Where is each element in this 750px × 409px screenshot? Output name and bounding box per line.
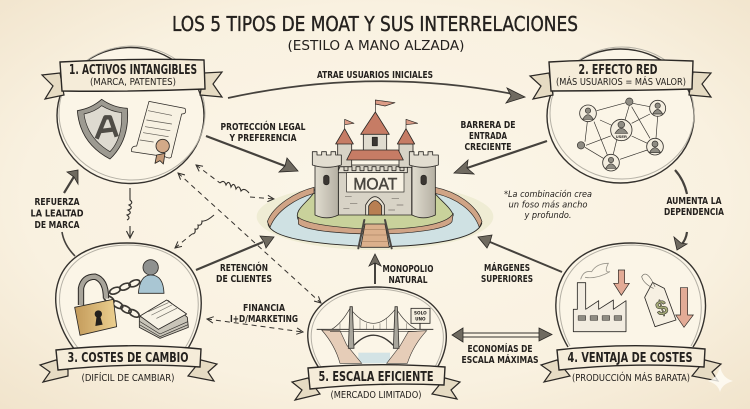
main roof (347, 150, 403, 160)
icon: network diagram (577, 98, 666, 171)
icon: red arrow down factory (614, 270, 629, 295)
label: financia I+D (230, 303, 298, 325)
label: margenes superiores: MÁRGENES (484, 262, 530, 274)
icon: patent scroll (132, 101, 186, 164)
moat sign: MOAT (353, 174, 397, 193)
water (358, 353, 390, 363)
arrow: economias de escala (452, 328, 552, 342)
subtitle: (ESTILO A MANO ALZADA) (288, 38, 464, 54)
label: economias de escala: ESCALA MÁXIMAS (462, 354, 538, 366)
banner 5 (292, 365, 460, 400)
arrow: squiggle activos to costes (127, 188, 132, 238)
label: aumenta la dependencia (664, 196, 724, 218)
bridge (358, 220, 392, 248)
label: proteccion legal: Y PREFERENCIA (229, 133, 297, 144)
label: retencion de clientes: DE CLIENTES (216, 274, 272, 285)
arrow labels (30, 70, 724, 366)
icon: papers (139, 300, 188, 338)
label: refuerza la lealtad: LA LEALTAD (30, 208, 84, 220)
icon: factory (573, 283, 626, 332)
label: barrera de entrada (460, 120, 516, 153)
island bank (298, 213, 453, 234)
note: combinacion (504, 189, 592, 221)
castle keep wall (338, 165, 412, 215)
central tower (361, 100, 395, 151)
banner 1 (42, 59, 222, 99)
merlons (337, 167, 407, 173)
rear right tower (397, 119, 418, 167)
circle 4 (556, 243, 706, 347)
label: margenes superiores (481, 262, 533, 285)
arrow: margenes superiores (478, 235, 562, 272)
label: monopolio natural: MONOPOLIO (382, 264, 434, 275)
moat water (268, 190, 482, 247)
central castle with moat (257, 100, 493, 250)
label: retencion de clientes (216, 262, 272, 285)
arrow: dashed squiggle activos to moat (196, 165, 274, 199)
subtitle 3: (DIFÍCIL DE CAMBIAR) (82, 372, 174, 384)
label: barrera de entrada: ENTRADA (469, 131, 507, 142)
label: atrae usuarios iniciales: ATRAE USUARIOS INICIALES (317, 70, 433, 81)
label: proteccion legal: PROTECCIÓN LEGAL (220, 121, 306, 133)
panel: 5 escala eficiente (292, 287, 460, 401)
icon: bridge and canyon (317, 307, 433, 363)
panel: 3 costes de cambio (40, 243, 217, 384)
label: barrera de entrada: BARRERA DE (460, 120, 516, 131)
circle 3 (56, 243, 201, 350)
banner 4 (541, 346, 721, 382)
banner 4: 4. VENTAJA DE COSTES (568, 351, 692, 366)
banner 2 (530, 60, 711, 99)
banner 1: (MARCA, PATENTES) (90, 77, 176, 88)
banner 3: 3. COSTES DE CAMBIO (68, 351, 189, 366)
icons: factory, price tag, arrows (573, 263, 693, 332)
label: barrera de entrada: CRECIENTE (464, 142, 512, 153)
icons: lock, chain, person, papers (75, 260, 188, 338)
circle 2 (547, 47, 694, 183)
label: financia I+D: I+D/MARKETING (230, 314, 298, 325)
icons: shield and patent (77, 99, 186, 164)
icon: padlock (75, 277, 117, 335)
label: economias de escala: ECONOMÍAS DE (468, 343, 533, 355)
arrow: refuerza la lealtad (62, 170, 78, 256)
label: retencion de clientes: RETENCIÓN (220, 262, 268, 274)
canyon right (387, 331, 427, 363)
arrow: monopolio natural (369, 254, 381, 284)
label: monopolio natural (382, 264, 434, 286)
label: refuerza la lealtad: DE MARCA (34, 220, 80, 231)
label: aumenta la dependencia: DEPENDENCIA (664, 207, 724, 218)
outer bank (267, 187, 482, 227)
arrow: atrae usuarios iniciales (228, 81, 525, 103)
panel: 4 ventaja de costes (541, 243, 721, 384)
icon: red arrow down tag (676, 288, 693, 327)
banner 3 (40, 346, 217, 382)
arrow: proteccion legal (206, 136, 298, 172)
icon: chain (103, 278, 141, 319)
label: financia I+D: FINANCIA (243, 303, 285, 314)
icon: smoke (581, 263, 610, 279)
island (297, 193, 453, 232)
label: refuerza la lealtad (30, 197, 84, 231)
rear left tower (336, 119, 354, 167)
icon: network diagram: USER (616, 134, 627, 139)
gate (366, 197, 384, 215)
banner 2: 2. EFECTO RED (578, 63, 658, 78)
note: combinacion: un foso más ancho (508, 200, 588, 210)
title: LOS 5 TIPOS DE MOAT Y SUS INTERRELACIONES (172, 12, 578, 36)
circle 1 (57, 46, 205, 184)
label: economias de escala (462, 343, 538, 366)
label: monopolio natural: NATURAL (388, 275, 428, 286)
label: margenes superiores: SUPERIORES (481, 274, 533, 285)
panel: 1 activos intangibles (42, 46, 222, 184)
banner 2: (MÁS USUARIOS = MÁS VALOR) (556, 76, 686, 88)
decorative sparkle (708, 366, 733, 392)
note: combinacion: y profundo. (523, 211, 572, 221)
panel: 2 efecto red (530, 47, 711, 183)
arrow: aumenta la dependencia (674, 170, 687, 250)
arrow: dashed link to escala eficiente (178, 173, 321, 303)
banner 5: 5. ESCALA EFICIENTE (318, 370, 434, 385)
label: aumenta la dependencia: AUMENTA LA (666, 196, 722, 207)
icon: person (138, 260, 164, 293)
wall bricks (343, 197, 403, 210)
left tower (312, 152, 341, 218)
grass halo (257, 183, 493, 250)
right tower (409, 152, 438, 218)
sign: solo uno (411, 308, 430, 329)
label: proteccion legal (220, 121, 306, 144)
icon: shield (77, 99, 128, 159)
arrow: retencion de clientes (196, 236, 274, 270)
sign: solo uno: UNO (415, 316, 426, 322)
sign: solo uno: SOLO (414, 310, 427, 316)
arrow: financia I+D (207, 319, 303, 332)
banner 1: 1. ACTIVOS INTANGIBLES (69, 63, 197, 78)
arrow: squiggle costes to moat (175, 215, 214, 248)
subtitle 5: (MERCADO LIMITADO) (330, 390, 422, 401)
icon: price tag: $ (653, 296, 671, 321)
arrows between concepts (62, 81, 687, 342)
circle 5 (308, 287, 446, 368)
note: combinacion: *La combinación crea (504, 189, 592, 200)
canyon left (322, 330, 362, 363)
bridge (317, 307, 433, 348)
label: refuerza la lealtad: REFUERZA (34, 197, 80, 208)
arrow: barrera de entrada (454, 141, 547, 174)
subtitle 4: (PRODUCCIÓN MÁS BARATA) (572, 372, 690, 384)
